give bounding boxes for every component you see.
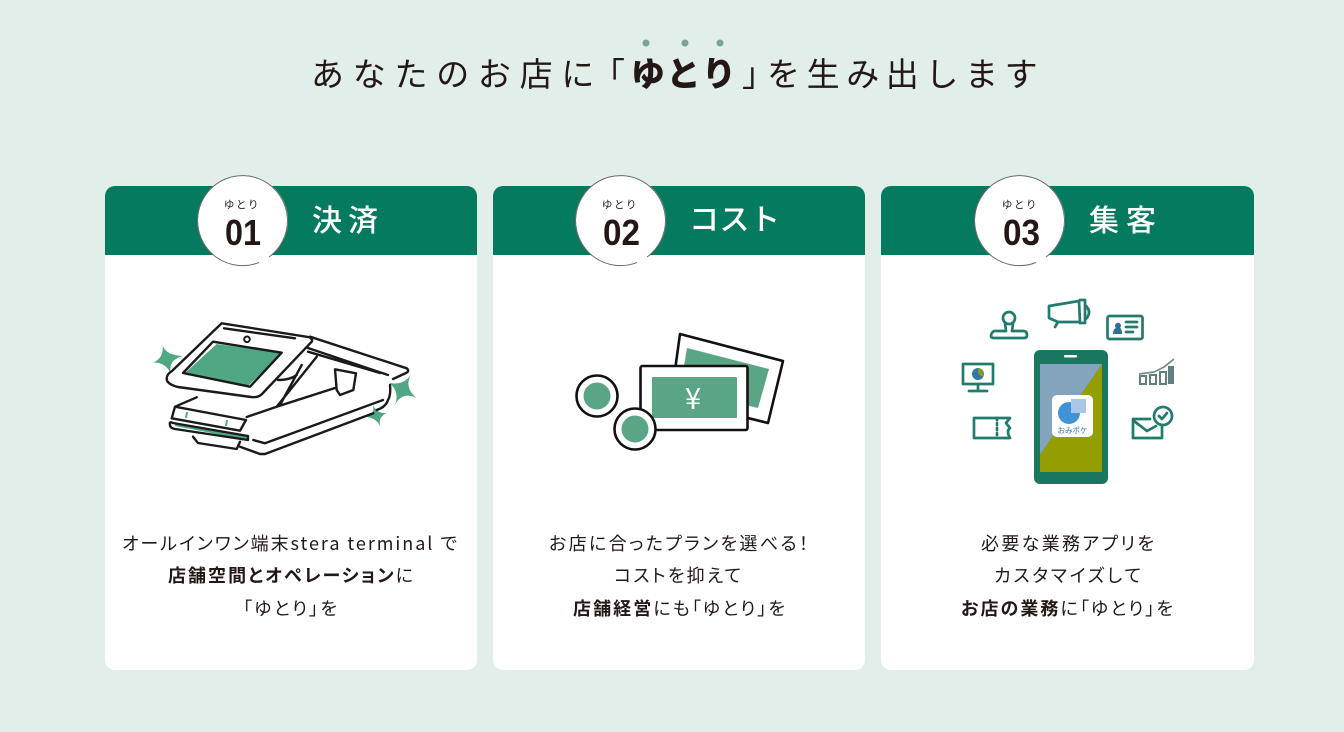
card slot strip: [175, 423, 248, 440]
title: ゆとり: [631, 47, 738, 96]
icon: monitor: [963, 364, 993, 391]
illustration: payment terminal: [153, 323, 417, 454]
illustration: smartphone and app icons: [963, 300, 1174, 484]
title: を生み出します: [767, 48, 1044, 96]
body text: [122, 530, 457, 621]
body text: 必要な業務アプリを: [981, 530, 1154, 556]
illustration: banknotes and coins: ¥: [685, 376, 701, 418]
body text: オールインワン端末stera terminal で: [122, 530, 457, 556]
tablet outline: [167, 323, 312, 397]
badge: ゆとり 01: ゆとり: [224, 197, 260, 212]
arm: [310, 337, 408, 379]
title: 」: [742, 48, 782, 96]
header bar: 決済: [105, 186, 477, 255]
icon: smartphone: [1034, 350, 1108, 484]
icon: ID card: [1108, 316, 1142, 339]
body text: 店舗経営にも「ゆとり」を: [573, 595, 785, 621]
badge: ゆとり 01: 01: [225, 212, 261, 253]
panel: 集客: [881, 176, 1254, 670]
icon: ticket: [974, 418, 1010, 438]
title: 「: [592, 48, 632, 96]
body text: 店舗空間とオペレーションに: [168, 562, 413, 588]
panel: コスト: [493, 176, 865, 670]
body text: カスタマイズして: [994, 562, 1141, 588]
title: [311, 40, 1044, 96]
badge: ゆとり 03: 03: [1003, 212, 1040, 253]
body text: [549, 530, 808, 621]
body text: [961, 530, 1173, 621]
heading: コスト: コスト: [689, 195, 780, 239]
body text: 「ゆとり」を: [243, 595, 337, 621]
badge: ゆとり 03: ゆとり: [1002, 197, 1038, 212]
icon: smartphone: おみポケ: [1058, 425, 1088, 436]
stars: [153, 345, 183, 373]
body text: お店の業務に「ゆとり」を: [961, 595, 1173, 621]
body text: コストを抑えて: [614, 562, 741, 588]
badge: ゆとり 02: ゆとり: [602, 197, 638, 212]
illustration: banknotes and coins: [576, 334, 783, 450]
icon: stamp: [991, 312, 1027, 338]
header bar: コスト: [493, 186, 865, 255]
badge: ゆとり 03: [974, 176, 1065, 266]
title: あなたのお店に: [311, 48, 601, 96]
icon: rising chart: [1139, 359, 1174, 384]
icon: megaphone: [1049, 300, 1089, 327]
base: [172, 397, 277, 431]
badge: ゆとり 02: 02: [603, 212, 640, 253]
panel: 決済: [105, 176, 477, 670]
badge: ゆとり 02: [575, 176, 666, 266]
body text: お店に合ったプランを選べる！: [549, 530, 808, 556]
heading: 決済: 決済: [312, 196, 378, 240]
icon: mail with check: [1133, 407, 1172, 438]
heading: 集客: 集客: [1089, 196, 1156, 240]
header bar: 集客: [881, 186, 1254, 255]
badge: ゆとり 01: [197, 176, 288, 266]
